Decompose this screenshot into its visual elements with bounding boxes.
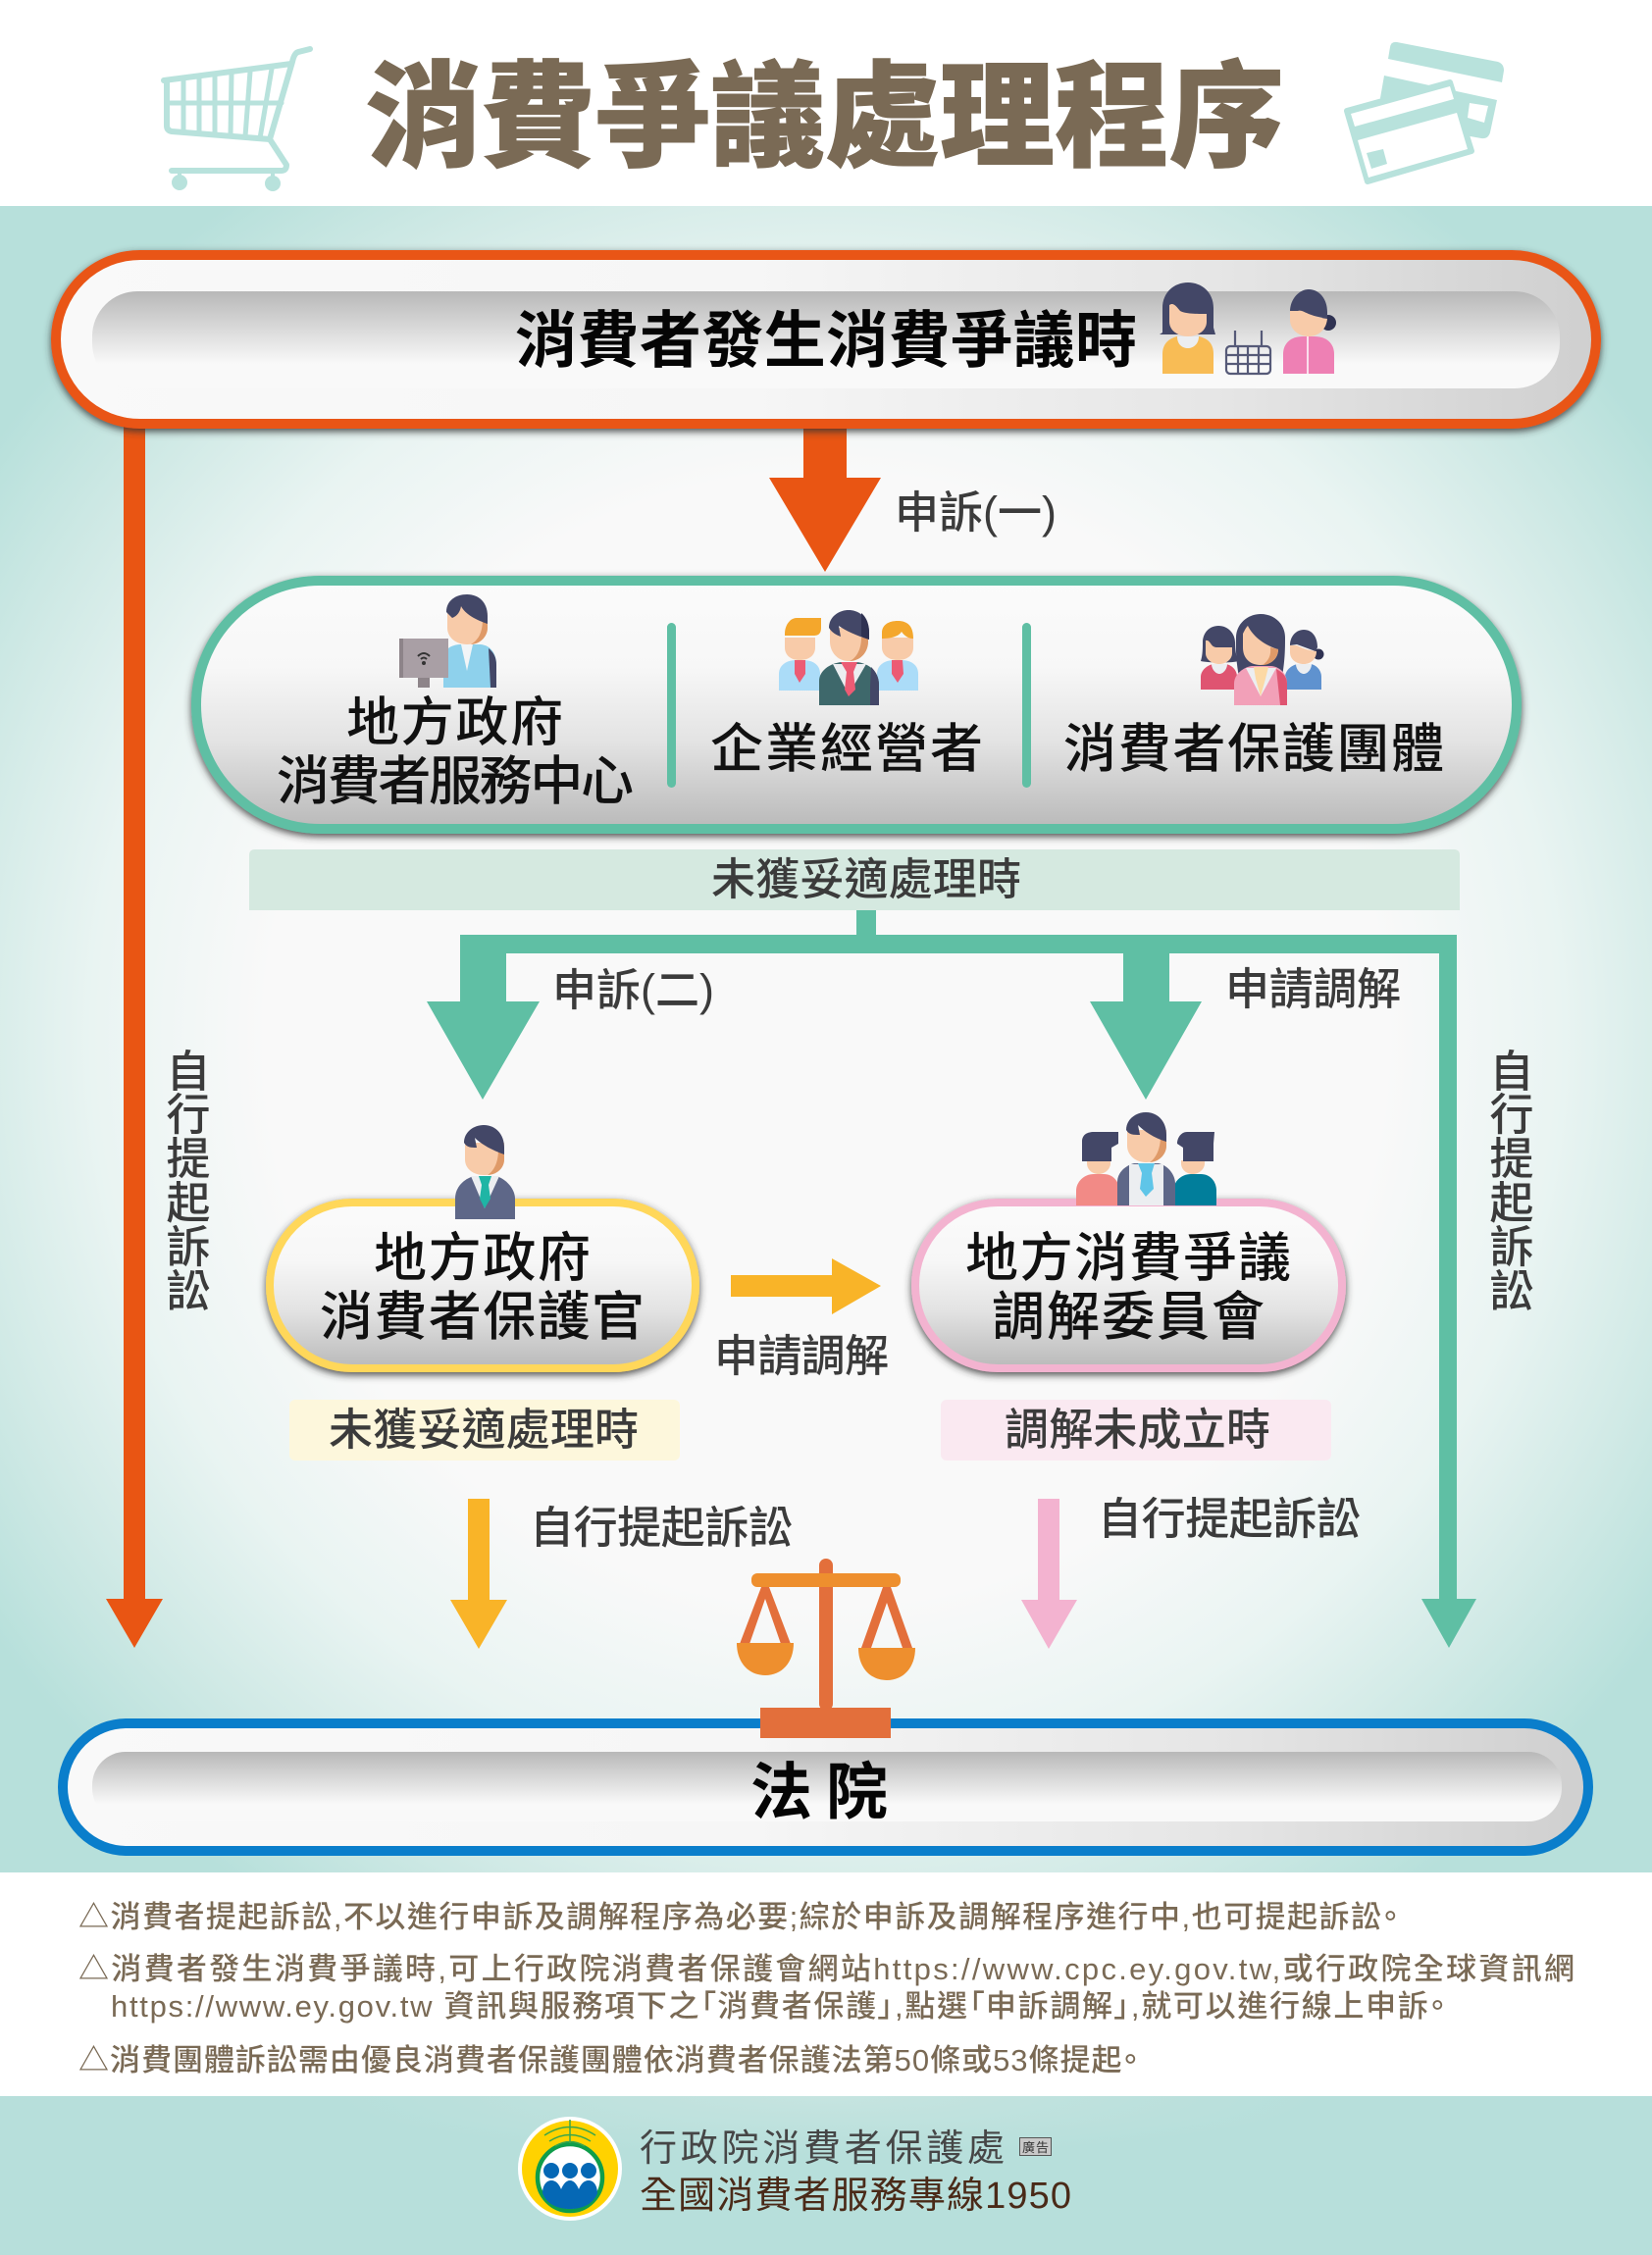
label: sue left: 行	[166, 1090, 211, 1140]
background: footer band	[0, 2096, 1652, 2255]
text: consumer protection groups: 消費者保護團體	[1063, 720, 1444, 779]
label: sue left: 起	[166, 1178, 211, 1228]
label: sue right: 訴	[1489, 1222, 1534, 1272]
panel: consumer ombudsman: 地方政府	[374, 1229, 591, 1288]
icon: woman	[1160, 282, 1215, 374]
panel: mediation committee: 調解委員會	[992, 1288, 1265, 1347]
icon: committee	[1076, 1112, 1216, 1205]
icon: credit cards	[1347, 42, 1504, 181]
band: not properly handled: 未獲妥適處理時	[711, 854, 1021, 904]
label: sue left: 訴	[166, 1222, 211, 1272]
label: apply mediation centre: 申請調解	[714, 1331, 889, 1381]
label: apply mediation right: 申請調解	[1225, 964, 1401, 1014]
icon: service centre agent	[399, 594, 496, 688]
notes: footnotes: https://www.ey.gov.tw 資訊與服務項下之「消費者保護」,點選「申訴調解」,就可以進行線上申訴。	[111, 1989, 1445, 2024]
text: hotline: 全國消費者服務專線1950	[640, 2176, 1071, 2217]
arrow: yellow to mediation	[731, 1258, 881, 1314]
icon: business operators	[779, 610, 918, 705]
icon: scales	[737, 1559, 915, 1738]
panel: first complaint bodies	[196, 581, 1517, 829]
panel: mediation committee: 地方消費爭議	[965, 1229, 1291, 1288]
arrow: orange centre	[769, 422, 881, 572]
title: 消費爭議處理程序	[366, 53, 1284, 181]
panel: court: 法院	[750, 1759, 888, 1827]
panel: consumer ombudsman: 消費者保護官	[320, 1288, 645, 1347]
panel: court	[63, 1723, 1588, 1851]
band: not properly handled	[249, 849, 1460, 910]
panel: consumer ombudsman	[270, 1203, 696, 1368]
label: sue right: 行	[1489, 1090, 1534, 1140]
heading: consumer dispute occurs: 消費者發生消費爭議時	[515, 307, 1137, 376]
label: sue left: 提	[166, 1134, 211, 1184]
divider left	[667, 623, 676, 788]
panel: mediation committee	[915, 1203, 1342, 1368]
text: local government consumer service centre: 地方政府	[346, 693, 563, 752]
text: business operators: 企業經營者	[710, 720, 983, 779]
notes: footnotes: △消費者發生消費爭議時,可上行政院消費者保護會網站https://www.cpc.ey.gov.tw,或行政院全球資訊網	[78, 1952, 1575, 1986]
icon: consumer groups	[1201, 614, 1324, 705]
icon: woman with bun	[1283, 289, 1336, 374]
text: agency name: 行政院消費者保護處	[640, 2128, 1005, 2170]
icon: shopping cart	[164, 49, 310, 190]
icon: ombudsman	[455, 1125, 515, 1219]
connector: green tree	[427, 910, 1476, 1648]
divider right	[1022, 623, 1031, 788]
notes: footnotes: △消費者提起訴訟,不以進行申訴及調解程序為必要;綜於申訴及調解程序進行中,也可提起訴訟。	[78, 1900, 1398, 1934]
panel: consumer dispute occurs	[56, 255, 1596, 424]
logo: consumer protection agency	[518, 2117, 622, 2221]
label: sue left: 訟	[166, 1266, 211, 1316]
badge: advertisement: 廣告	[1022, 2140, 1049, 2155]
label: sue pink: 自行提起訴訟	[1098, 1494, 1361, 1544]
arrow: yellow down	[450, 1499, 507, 1649]
background: flow area	[0, 206, 1652, 1872]
notes: footnotes	[78, 1900, 1575, 2077]
arrow: orange left long	[106, 422, 163, 1648]
icon: basket	[1226, 331, 1270, 374]
label: sue yellow: 自行提起訴訟	[530, 1503, 793, 1553]
label: sue right: 訟	[1489, 1266, 1534, 1316]
text: local government consumer service centre	[277, 693, 634, 811]
text: local government consumer service centre: 消費者服務中心	[277, 752, 634, 811]
band: not properly handled yellow: 未獲妥適處理時	[329, 1405, 639, 1455]
arrow: pink down	[1021, 1499, 1077, 1649]
label: sue left: 自	[166, 1047, 211, 1097]
band: not properly handled yellow	[289, 1400, 680, 1461]
band: mediation not established: 調解未成立時	[1005, 1405, 1270, 1455]
notes: footnotes: △消費團體訴訟需由優良消費者保護團體依消費者保護法第50條或53條提起。	[78, 2043, 1138, 2077]
label: sue right: 起	[1489, 1178, 1534, 1228]
band: mediation not established	[941, 1400, 1331, 1461]
label: sue right: 自	[1489, 1047, 1534, 1097]
label: complaint one: 申訴(一)	[895, 487, 1057, 538]
label: complaint two: 申訴(二)	[552, 965, 714, 1015]
label: sue right: 提	[1489, 1134, 1534, 1184]
